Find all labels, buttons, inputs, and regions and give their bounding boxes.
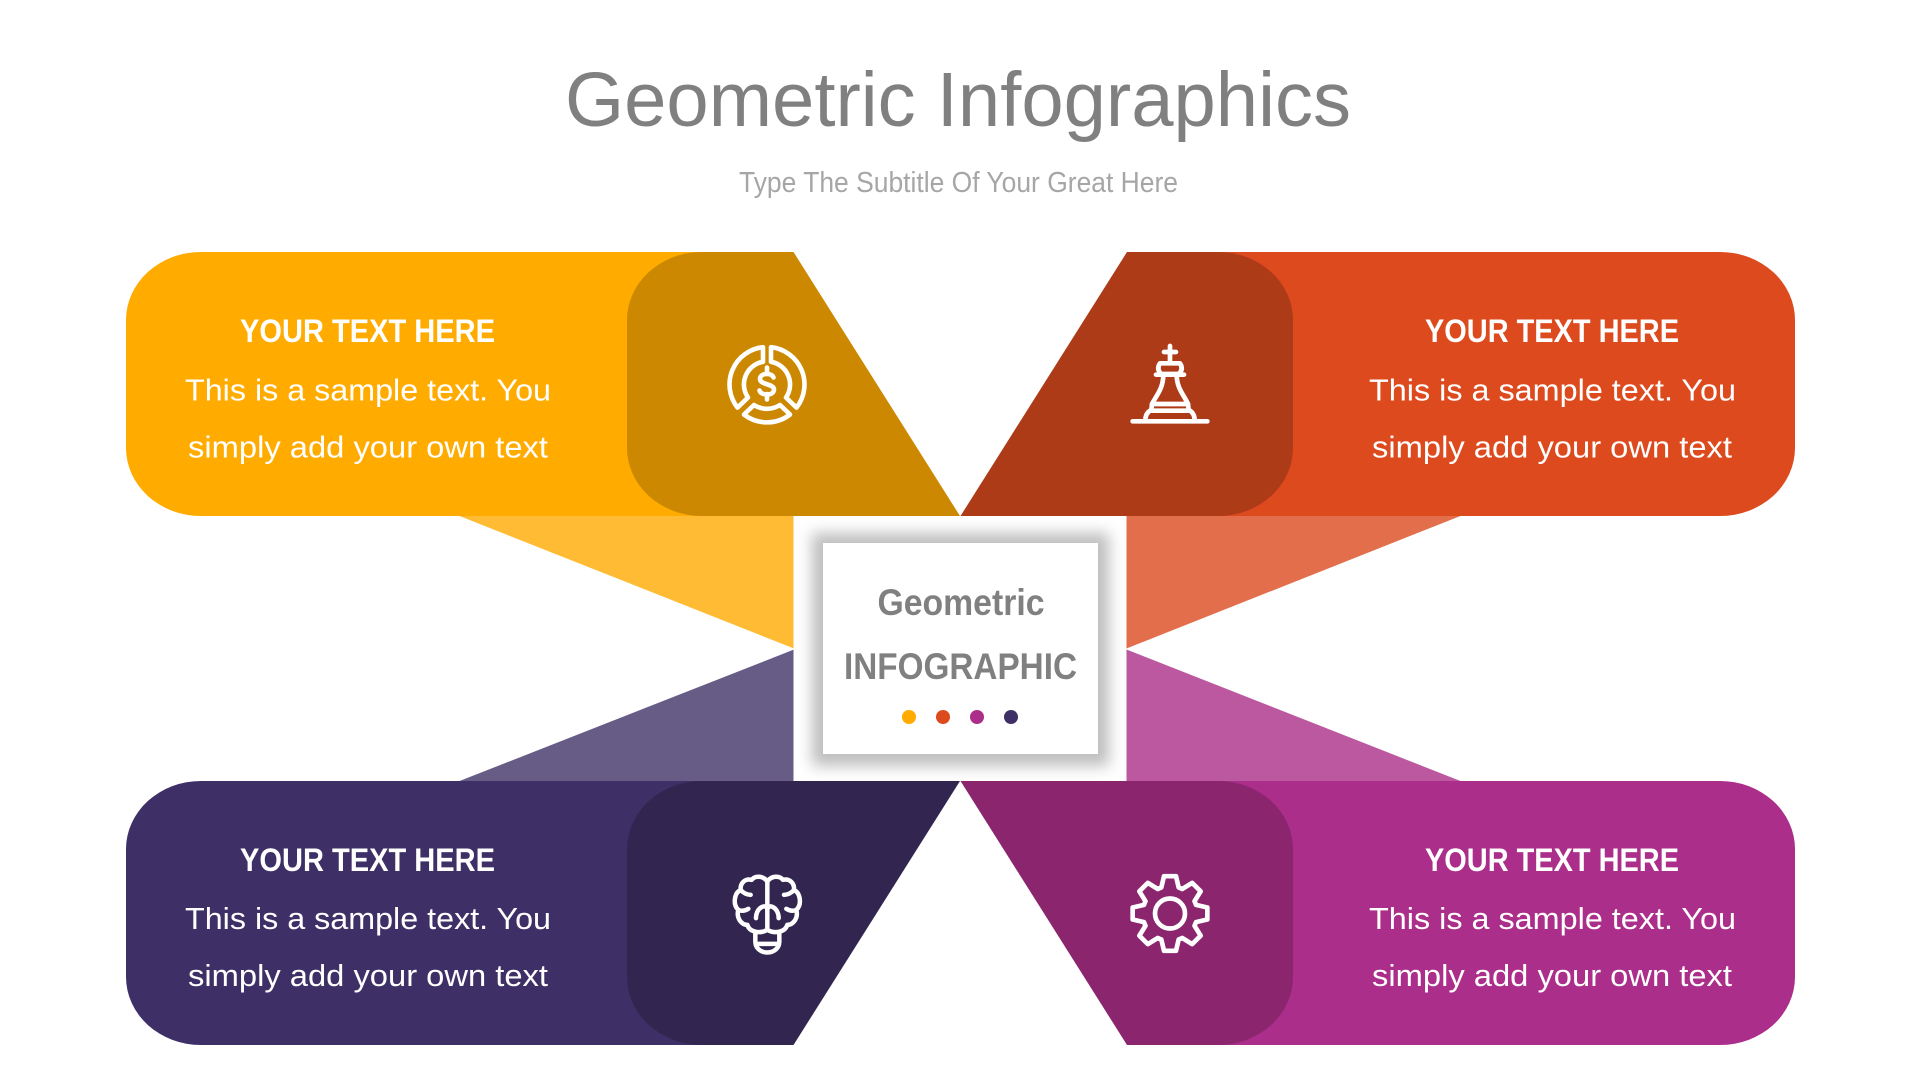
body text: bottom left [185,901,551,993]
subtitle: Type The Subtitle Of Your Great Here [739,167,1178,199]
body text: bottom right: This is a sample text. You [1369,901,1736,936]
connector: bottom left [457,650,794,782]
body text: top left: This is a sample text. You [185,372,551,408]
heading: top right: YOUR TEXT HERE [1425,313,1679,349]
icon: gear [1133,876,1207,951]
heading: bottom right: YOUR TEXT HERE [1425,842,1679,878]
icon: brain bulb [735,877,800,952]
body text: bottom right: simply add your own text [1372,958,1732,993]
panel body: top right [1200,252,1795,516]
panel body: top left [126,252,720,516]
icon: dollar target [730,347,804,422]
panel: bottom left navy [126,650,960,1045]
icon backing: bottom left [627,781,960,1045]
heading: bottom left: YOUR TEXT HERE [240,842,495,878]
icon backing: bottom right [960,781,1293,1045]
body text: bottom left: simply add your own text [188,958,548,993]
center heading line 2: INFOGRAPHIC [844,646,1077,687]
icon: chess king [1133,346,1207,421]
icon backing: top left [627,252,960,516]
panel: top left orange [126,252,960,648]
connector: top left [457,515,794,648]
connector: bottom right [1126,650,1463,782]
panel: top right red [960,252,1795,648]
body text: top right [1369,372,1736,464]
center heading line 1: Geometric [878,582,1044,623]
center card [823,543,1098,754]
panel: bottom right magenta [960,650,1795,1045]
center card text [844,582,1077,687]
body text: bottom right [1369,901,1736,993]
body text: top right: simply add your own text [1372,430,1732,464]
panel body: bottom right [1200,781,1795,1045]
connector: top right [1126,515,1463,648]
colour dots [902,710,1018,724]
panel body: bottom left [126,781,720,1045]
body text: top left: simply add your own text [188,430,548,464]
body text: bottom left: This is a sample text. You [185,901,551,936]
body text: top right: This is a sample text. You [1369,372,1736,408]
body text: top left [185,372,551,464]
center white box [794,516,1126,781]
icon backing: top right [960,252,1293,516]
title: Geometric Infographics [565,57,1351,143]
heading: top left: YOUR TEXT HERE [240,313,495,349]
